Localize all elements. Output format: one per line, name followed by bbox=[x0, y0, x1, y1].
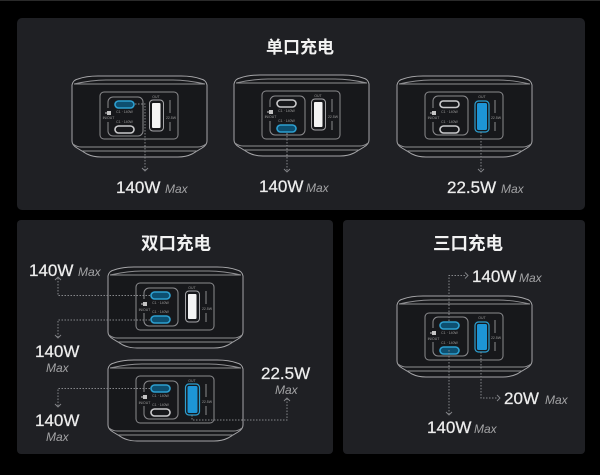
label: 140W Max bbox=[259, 177, 330, 196]
label: 140W Max: 140W bbox=[116, 178, 160, 197]
label: 140W Max third: Max bbox=[46, 430, 70, 444]
device: single port C1: IN/OUT bbox=[103, 116, 115, 120]
label: 22.5W Max: 22.5W bbox=[261, 364, 310, 383]
arrow: C1 to 140W top bbox=[449, 276, 466, 321]
heading: dual port: 双口充电 bbox=[141, 234, 211, 254]
device: triple port bbox=[397, 296, 532, 377]
label: 20W Max: 20W bbox=[504, 389, 539, 408]
arrow: top C2 to 140W bbox=[58, 320, 150, 337]
label: 140W Max top: Max bbox=[519, 271, 543, 285]
device: dual port C1 + USB-A: 22.5W bbox=[202, 400, 213, 404]
arrow: C1 to 140W bbox=[135, 104, 145, 170]
device: single port C2: IN/OUT bbox=[265, 115, 277, 119]
device: dual port C1 + USB-A: C1 · 140W bbox=[152, 403, 170, 407]
label: 20W Max bbox=[504, 389, 569, 408]
label: 140W Max top bbox=[29, 261, 102, 280]
label: 140W Max bbox=[116, 178, 189, 197]
label: 140W Max bottom: Max bbox=[474, 422, 498, 436]
label: 140W Max top bbox=[472, 267, 543, 286]
label: 140W Max bottom bbox=[427, 418, 498, 437]
device: single port C2: C1 · 140W bbox=[278, 109, 296, 113]
label: 140W Max second bbox=[35, 342, 79, 375]
device: single port USB-A: IN/OUT bbox=[428, 116, 440, 120]
label: 140W Max third bbox=[35, 411, 79, 444]
arrow: USB-A to 22.5W bbox=[192, 399, 287, 420]
device: dual port C1 + C2 bbox=[108, 267, 243, 348]
device: dual port C1 + USB-A: IN/OUT bbox=[139, 401, 151, 405]
arrow: lower C1 to 140W bbox=[58, 388, 150, 406]
device: dual port C1 + USB-A: OUT bbox=[188, 379, 197, 383]
device: triple port: C1 · 140W bbox=[441, 341, 459, 345]
label: 22.5W Max: Max bbox=[275, 383, 299, 397]
label: 140W Max: Max bbox=[306, 181, 330, 195]
label: 140W Max bottom: 140W bbox=[427, 418, 471, 437]
heading: triple port: 三口充电 bbox=[433, 234, 503, 254]
device: single port C1: 22.5W bbox=[166, 116, 177, 120]
device: single port C2: OUT bbox=[314, 94, 323, 98]
label: 140W Max top: Max bbox=[78, 265, 102, 279]
device: single port USB-A: C1 · 140W bbox=[441, 120, 459, 124]
panel: triple-port charging bbox=[343, 220, 585, 454]
device: triple port: 22.5W bbox=[491, 336, 502, 340]
device: single port C2 bbox=[234, 75, 369, 156]
label: 22.5W Max: 22.5W bbox=[447, 178, 496, 197]
arrow: C2 to 140W bbox=[286, 133, 288, 171]
device: triple port: C1 · 140W bbox=[441, 331, 459, 335]
device: single port C1: OUT bbox=[152, 95, 161, 99]
label: 20W Max: Max bbox=[545, 393, 569, 407]
label: 140W Max second: 140W bbox=[35, 342, 79, 361]
arrow: C2 to 140W bottom bbox=[448, 350, 450, 414]
device: single port USB-A bbox=[397, 76, 532, 157]
arrow: top C1 to 140W bbox=[58, 278, 150, 296]
device: single port USB-A: 22.5W bbox=[491, 116, 502, 120]
device: dual port C1 + C2: C1 · 140W bbox=[152, 301, 170, 305]
label: 22.5W Max: Max bbox=[501, 182, 525, 196]
device: single port C1: C1 · 140W bbox=[116, 110, 134, 114]
device: triple port: OUT bbox=[478, 316, 487, 320]
heading: single port: 单口充电 bbox=[266, 37, 334, 57]
arrow: USB-A to 20W bbox=[481, 352, 498, 398]
arrow: USB-A to 22.5W bbox=[480, 132, 482, 171]
device: dual port C1 + C2: C1 · 140W bbox=[152, 310, 170, 314]
device: single port C2: C1 · 140W bbox=[278, 119, 296, 123]
label: 140W Max second: Max bbox=[46, 361, 70, 375]
label: 140W Max: 140W bbox=[259, 177, 303, 196]
device: single port USB-A: OUT bbox=[478, 95, 487, 99]
device: dual port C1 + USB-A bbox=[108, 360, 243, 441]
label: 140W Max third: 140W bbox=[35, 411, 79, 430]
label: 22.5W Max bbox=[447, 178, 525, 197]
label: 22.5W Max bbox=[261, 364, 310, 397]
device: single port USB-A: C1 · 140W bbox=[441, 110, 459, 114]
device: single port C2: 22.5W bbox=[328, 115, 339, 119]
label: 140W Max top: 140W bbox=[472, 267, 516, 286]
panel: dual-port charging bbox=[17, 220, 333, 454]
device: dual port C1 + C2: IN/OUT bbox=[139, 308, 151, 312]
device: dual port C1 + C2: OUT bbox=[188, 286, 197, 290]
device: single port C1 bbox=[72, 76, 207, 157]
device: triple port: IN/OUT bbox=[428, 337, 440, 341]
label: 140W Max top: 140W bbox=[29, 261, 73, 280]
label: 140W Max: Max bbox=[165, 182, 189, 196]
device: dual port C1 + USB-A: C1 · 140W bbox=[152, 394, 170, 398]
device: single port C1: C1 · 140W bbox=[116, 120, 134, 124]
device: dual port C1 + C2: 22.5W bbox=[202, 307, 213, 311]
